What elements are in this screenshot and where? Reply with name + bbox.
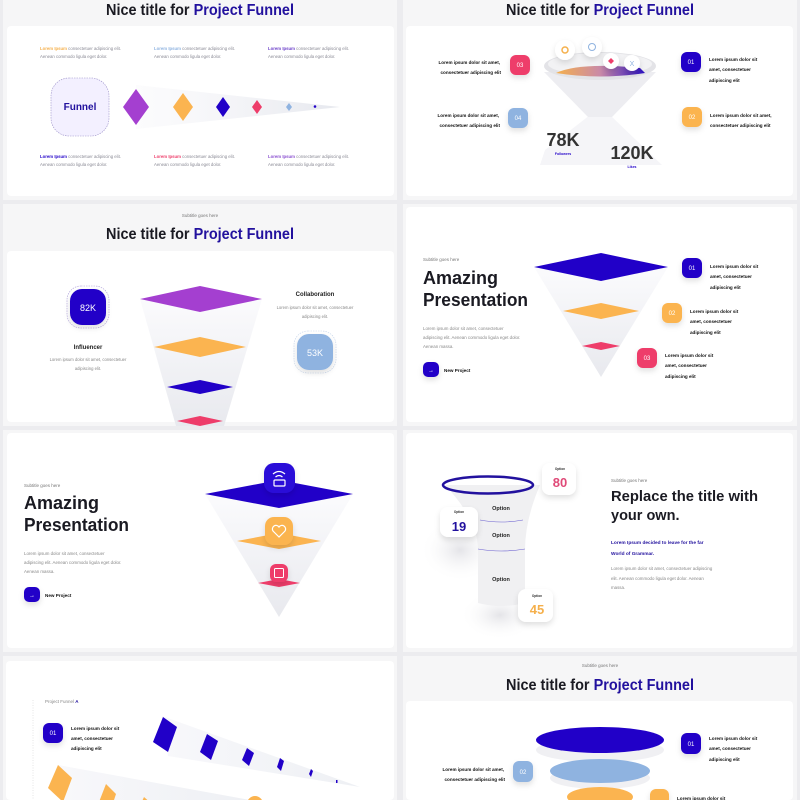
- collaboration text: adipiscing elit.: [302, 314, 328, 319]
- left items: Lorem ipsum dolor sit amet,: [438, 60, 500, 65]
- right items: amet, consectetuer: [709, 67, 751, 72]
- influencer text: adipiscing elit.: [75, 366, 101, 371]
- button: New Project: [444, 368, 471, 373]
- badge 82K: [67, 286, 109, 328]
- funnel graphic: [540, 37, 662, 165]
- funnel body: [420, 476, 540, 640]
- funnel body: Option: [492, 506, 510, 512]
- text blocks bottom: Aenean commodo ligula eget dolor.: [154, 162, 221, 167]
- panel: slide 6 option funnel: Option: [555, 467, 565, 471]
- influencer text: Influencer: [74, 345, 103, 351]
- text blocks bottom: Aenean commodo ligula eget dolor.: [268, 162, 335, 167]
- button: [24, 587, 72, 602]
- heading: Aenean massa.: [423, 344, 454, 349]
- panel: slide 2 social funnel: 01: [688, 60, 695, 66]
- badge 82K: 82K: [80, 303, 96, 313]
- stacked ellipses: [536, 727, 664, 800]
- text blocks top: [40, 46, 349, 59]
- panel: slide 8 ellipse funnel: adipiscing elit: [709, 757, 740, 762]
- panel: slide 4 amazing presentation triangle: 01: [689, 266, 696, 272]
- heading: Lorem ipsum dolor sit amet, consectetuer: [24, 551, 105, 556]
- heading: [24, 483, 129, 574]
- heading text: Lorem ipsum dolor sit amet, consectetuer adipiscing: [611, 566, 713, 571]
- heading: Amazing: [24, 493, 99, 513]
- panel: slide 6 option funnel: Option: [454, 510, 464, 514]
- funnel body: Option: [492, 577, 510, 583]
- panel: slide 4 amazing presentation triangle: adipiscing elit: [690, 330, 721, 335]
- text blocks bottom: Lorem Ipsum consectetuer adipiscing elit.: [40, 154, 121, 159]
- panel: slide 6 option funnel: 19: [452, 519, 466, 534]
- funnel label blob: Funnel: [64, 102, 97, 113]
- item 01: [43, 723, 120, 751]
- heading text: World of Grammar.: [611, 551, 654, 557]
- collaboration text: Collaboration: [296, 292, 335, 298]
- text blocks bottom: [40, 154, 349, 167]
- icon: save: [270, 564, 288, 582]
- panel: slide 4 amazing presentation triangle: amet, consectetuer: [665, 363, 707, 368]
- panel: slide 8 ellipse funnel: 01: [688, 742, 695, 748]
- funnel diamonds: [140, 286, 262, 426]
- panel: slide 1 funnel diamonds: [7, 2, 394, 196]
- orange diamond band: [48, 765, 263, 800]
- text blocks top: Lorem Ipsum consectetuer adipiscing elit.: [40, 46, 121, 51]
- heading: Presentation: [423, 290, 528, 310]
- panel: slide 6 option funnel: 80: [553, 475, 567, 490]
- stats: 78K: [546, 130, 580, 150]
- title: Nice title for Project Funnel: [106, 2, 294, 19]
- panel: slide 2 social funnel: 02: [689, 115, 696, 121]
- panel: slide 6 option funnel: [406, 433, 793, 648]
- panel: slide 6 option funnel: Option: [532, 594, 542, 598]
- triangle funnel: [534, 253, 668, 377]
- heading: Presentation: [24, 515, 129, 535]
- panel: slide 4 amazing presentation triangle: amet, consectetuer: [710, 274, 752, 279]
- panel: slide 4 amazing presentation triangle: amet, consectetuer: [690, 319, 732, 324]
- left items: consectetuer adipiscing elit: [439, 123, 500, 128]
- stats: 120K: [610, 143, 654, 163]
- panel: slide 6 option funnel: 45: [530, 602, 544, 617]
- panel: slide 4 amazing presentation triangle: 03: [644, 356, 651, 362]
- button: →: [428, 368, 434, 374]
- panel: slide 4 amazing presentation triangle: adipiscing elit: [665, 374, 696, 379]
- collaboration text: Lorem ipsum dolor sit amet, consectetuer: [277, 305, 354, 310]
- item 01: Lorem ipsum dolor sit: [71, 726, 120, 731]
- heading: Subtitle goes here: [24, 483, 61, 488]
- panel: slide 8 ellipse funnel: Subtitle goes here: [582, 663, 619, 668]
- value cards: [440, 463, 576, 622]
- heading: Lorem ipsum dolor sit amet, consectetuer: [423, 326, 504, 331]
- heading text: Replace the title with: [611, 489, 758, 505]
- text blocks top: Aenean commodo ligula eget dolor.: [154, 54, 221, 59]
- right items: Lorem ipsum dolor sit: [709, 57, 758, 62]
- panel: slide 2 social funnel: 03: [517, 63, 524, 69]
- panel: slide 5 icon triangle: [7, 433, 394, 648]
- right items: [709, 57, 772, 128]
- stats: [546, 130, 654, 169]
- heading: Subtitle goes here: [423, 257, 460, 262]
- heading text: your own.: [611, 508, 679, 524]
- funnel label blob: [51, 78, 109, 136]
- panel: slide 2 social funnel: [406, 2, 793, 196]
- panel: slide 2 social funnel: 04: [515, 116, 522, 122]
- button: [423, 362, 471, 377]
- text blocks top: Aenean commodo ligula eget dolor.: [268, 54, 335, 59]
- left items: Lorem ipsum dolor sit amet,: [437, 113, 499, 118]
- heading: Amazing: [423, 268, 498, 288]
- heading text: Lorem Ipsum decided to leave for the far: [611, 540, 704, 546]
- funnel graphic: X: [630, 61, 635, 68]
- panel: slide 4 amazing presentation triangle: 02: [669, 311, 676, 317]
- numbered items: [637, 258, 702, 368]
- panel: slide 4 amazing presentation triangle: Lorem ipsum dolor sit: [665, 353, 714, 358]
- panel: slide 3 influencer funnel: [7, 213, 394, 426]
- stats: Likes: [628, 165, 637, 169]
- left items: [437, 60, 501, 128]
- title: Nice title for Project Funnel: [106, 226, 294, 243]
- button: New Project: [45, 593, 72, 598]
- icon: heart: [265, 517, 293, 545]
- cone with diamonds: [123, 85, 340, 129]
- panel: slide 3 influencer funnel: Subtitle goes here: [182, 213, 219, 218]
- heading: [423, 257, 528, 349]
- triangle with icons: [205, 463, 353, 617]
- text blocks bottom: Lorem Ipsum consectetuer adipiscing elit.: [268, 154, 349, 159]
- icon: router: [264, 463, 295, 493]
- panel: slide 7 project funnel A: [6, 661, 394, 800]
- item 01: 01: [50, 731, 57, 737]
- text blocks top: Lorem Ipsum consectetuer adipiscing elit.: [268, 46, 349, 51]
- influencer text: [50, 345, 127, 371]
- blue diamond band: [153, 716, 360, 787]
- stats: Followers: [555, 152, 571, 156]
- panel: slide 4 amazing presentation triangle: Lorem ipsum dolor sit: [690, 309, 739, 314]
- heading text: Subtitle goes here: [611, 478, 648, 483]
- text blocks top: Lorem Ipsum consectetuer adipiscing elit.: [154, 46, 235, 51]
- heading: Aenean massa.: [24, 569, 55, 574]
- panel: slide 4 amazing presentation triangle: Lorem ipsum dolor sit: [710, 264, 759, 269]
- badge 53K: 53K: [307, 348, 323, 358]
- panel: slide 8 ellipse funnel: [406, 663, 793, 800]
- panel: slide 8 ellipse funnel: Lorem ipsum dolor sit amet,: [442, 767, 504, 772]
- heading: adipiscing elit. Aenean commodo ligula eget dolor.: [423, 335, 520, 340]
- text blocks bottom: Aenean commodo ligula eget dolor.: [40, 162, 107, 167]
- heading text: [611, 478, 758, 590]
- item 01: adipiscing elit: [71, 746, 102, 751]
- left items: consectetuer adipiscing elit: [440, 70, 501, 75]
- badge 53K: [294, 331, 336, 373]
- panel: slide 8 ellipse funnel: Lorem ipsum dolor sit: [709, 736, 758, 741]
- panel: slide 4 amazing presentation triangle: adipiscing elit: [710, 285, 741, 290]
- title: Nice title for Project Funnel: [506, 2, 694, 19]
- influencer text: Lorem ipsum dolor sit amet, consectetuer: [50, 357, 127, 362]
- funnel body: Option: [492, 533, 510, 539]
- panel: slide 7 project funnel A: Project Funnel A: [45, 699, 79, 704]
- text blocks top: Aenean commodo ligula eget dolor.: [40, 54, 107, 59]
- item 01: amet, consectetuer: [71, 736, 113, 741]
- title: Nice title for Project Funnel: [506, 677, 694, 694]
- panel: slide 4 amazing presentation triangle: [406, 207, 793, 422]
- items: [513, 733, 701, 800]
- collaboration text: [277, 292, 354, 319]
- right items: consectetuer adipiscing elit: [710, 123, 771, 128]
- panel: slide 8 ellipse funnel: amet, consectetuer: [709, 746, 751, 751]
- right items: adipiscing elit: [709, 78, 740, 83]
- panel: slide 8 ellipse funnel: 02: [520, 770, 527, 776]
- right items: Lorem ipsum dolor sit amet,: [710, 113, 772, 118]
- button: →: [29, 593, 35, 599]
- heading text: massa.: [611, 585, 625, 590]
- heading text: elit. Aenean commodo ligula eget dolor. Aenean: [611, 576, 704, 581]
- panel: slide 8 ellipse funnel: consectetuer adipiscing elit: [444, 777, 505, 782]
- text blocks bottom: Lorem Ipsum consectetuer adipiscing elit.: [154, 154, 235, 159]
- heading: adipiscing elit. Aenean commodo ligula eget dolor.: [24, 560, 121, 565]
